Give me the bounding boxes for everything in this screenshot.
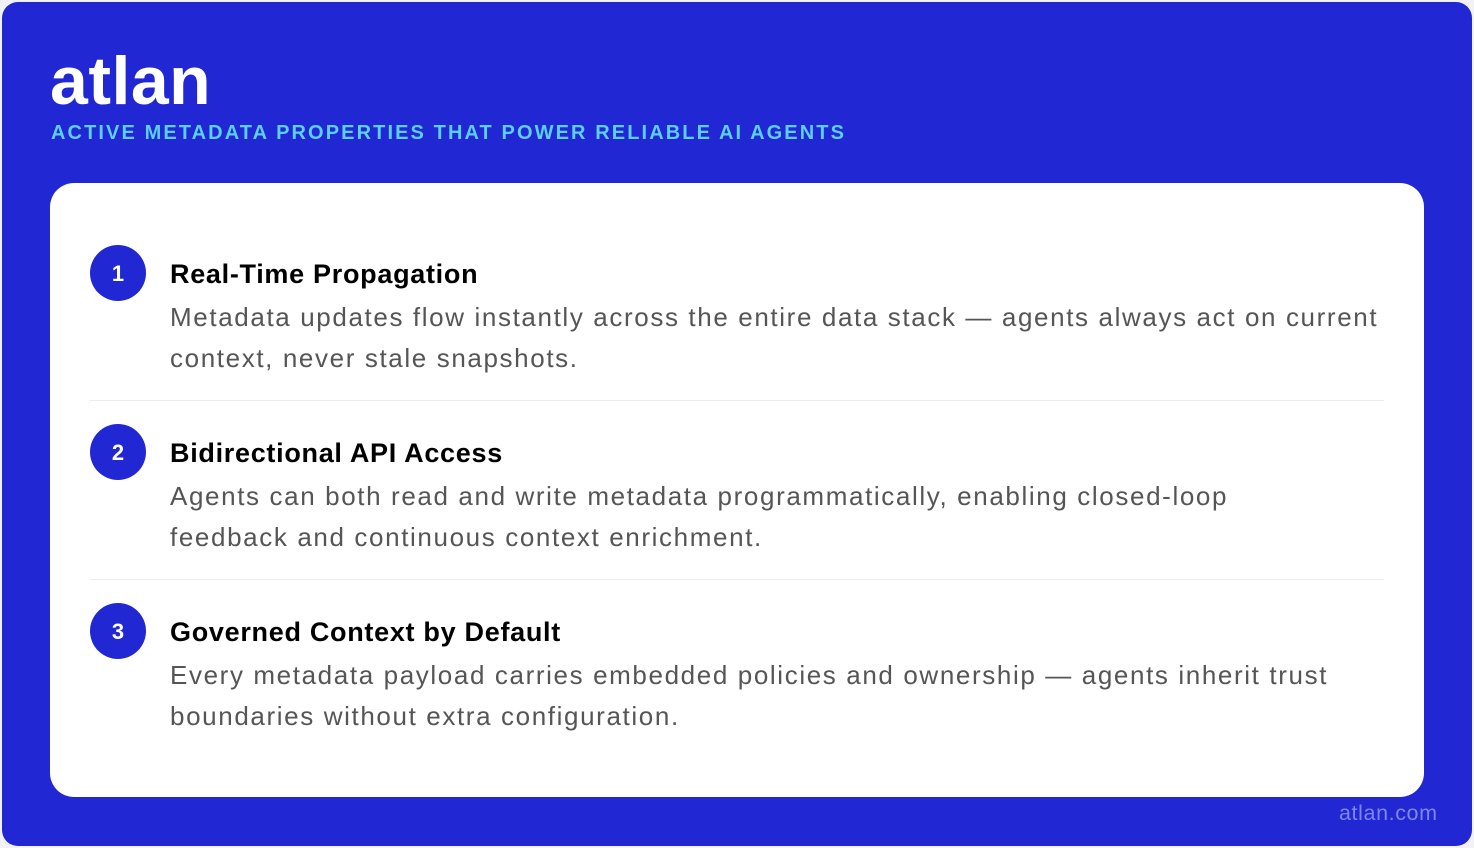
badge 1 bbox=[90, 245, 146, 301]
item 1 title: Real-Time Propagation bbox=[170, 259, 478, 289]
item 2 text: Agents can both read and write metadata programmatically, enabling closed-loop bbox=[170, 481, 1228, 511]
subtitle: ACTIVE METADATA PROPERTIES THAT POWER RELIABLE AI AGENTS bbox=[51, 122, 846, 144]
item 3 title: Governed Context by Default bbox=[170, 617, 561, 647]
item 3 text: Every metadata payload carries embedded policies and ownership — agents inherit trust bbox=[170, 660, 1328, 690]
badge 3: 3 bbox=[112, 619, 124, 644]
panel: properties card bbox=[50, 183, 1424, 797]
logo: atlan bbox=[50, 43, 211, 119]
item 3 text: boundaries without extra configuration. bbox=[170, 701, 680, 731]
item 3 bbox=[90, 603, 1328, 731]
item 1 text bbox=[170, 302, 1378, 373]
badge 3 bbox=[90, 603, 146, 659]
item 1 text: context, never stale snapshots. bbox=[170, 343, 579, 373]
item 2 bbox=[90, 424, 1228, 552]
item 2 text bbox=[170, 481, 1228, 552]
item 1 bbox=[90, 245, 1378, 373]
item 2 text: feedback and continuous context enrichment. bbox=[170, 522, 763, 552]
item 3 text bbox=[170, 660, 1328, 731]
footer url: atlan.com bbox=[1339, 801, 1438, 825]
item 2 title: Bidirectional API Access bbox=[170, 438, 503, 468]
badge 1: 1 bbox=[112, 261, 124, 286]
item 1 text: Metadata updates flow instantly across the entire data stack — agents always act on current bbox=[170, 302, 1378, 332]
badge 2: 2 bbox=[112, 440, 124, 465]
badge 2 bbox=[90, 424, 146, 480]
